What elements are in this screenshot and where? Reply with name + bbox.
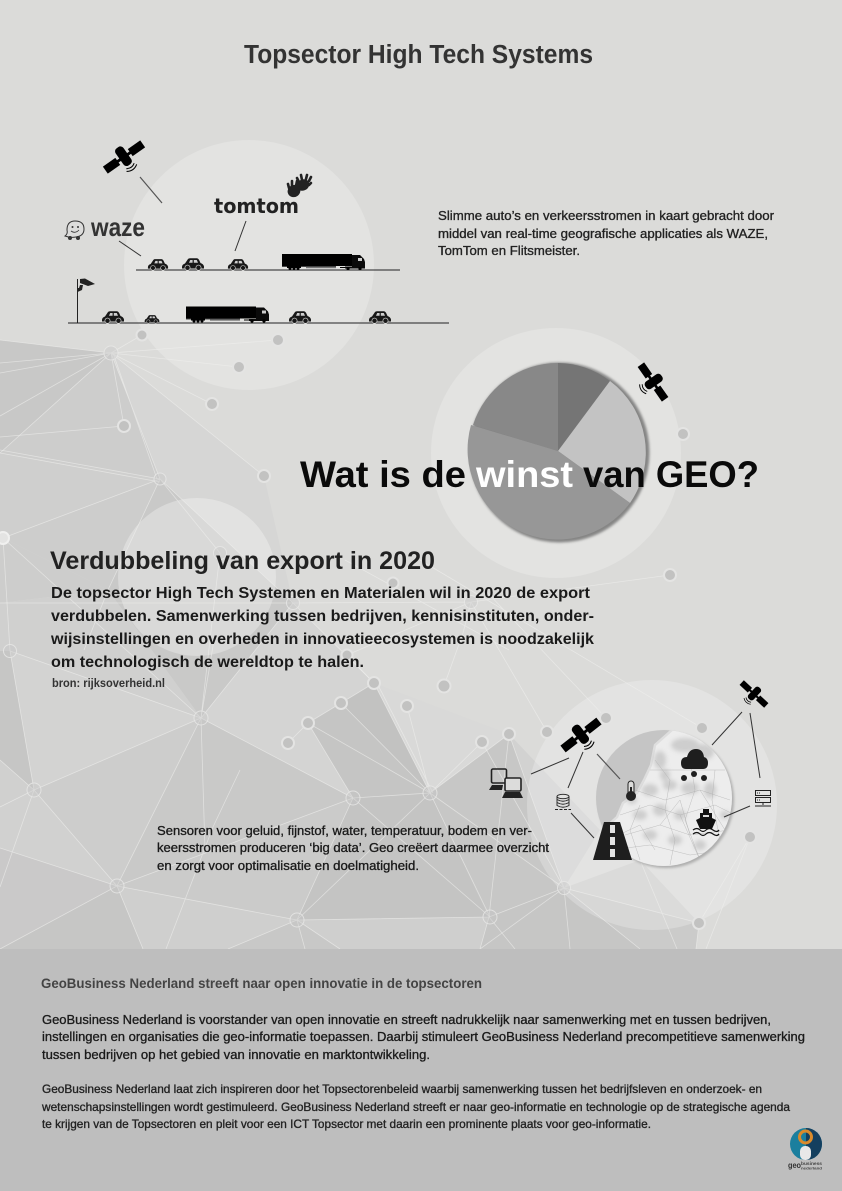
waze connector line [119, 241, 141, 256]
road lower with vehicles and camera [68, 278, 449, 323]
map of the Netherlands [590, 730, 740, 870]
icon: satellite [629, 359, 674, 408]
icon: thermometer [626, 781, 636, 801]
icon: satellite [99, 135, 152, 183]
export heading: Verdubbeling van export in 2020 [50, 547, 435, 575]
bottom panel heading: GeoBusiness Nederland streeft naar open innovatie in de topsectoren [41, 975, 482, 991]
satellite connector line [140, 177, 162, 203]
logo: geobusiness nederland: business [801, 1161, 823, 1166]
bottom panel [0, 949, 842, 1191]
export paragraph: verdubbelen. Samenwerking tussen bedrijven, kennisinstituten, onder- [51, 608, 594, 625]
traffic description text [438, 209, 774, 258]
traffic description text: Slimme auto’s en verkeersstromen in kaart gebracht door [438, 209, 774, 223]
bottom paragraph one: GeoBusiness Nederland is voorstander van open innovatie en streeft nadrukkelijk naar samenwerking met en tussen bedrijven, [42, 1012, 771, 1027]
logo: geobusiness nederland: nederland [801, 1166, 823, 1170]
sensors paragraph: keersstromen produceren ‘big data’. Geo creëert daarmee overzicht [157, 841, 550, 855]
bottom paragraph two [41, 1083, 791, 1131]
title: Topsector High Tech Systems [244, 41, 593, 69]
pie chart [468, 362, 650, 542]
bottom paragraph two: te krijgen van de Topsectoren en pleit voor een ICT Topsector met daarin een prominente plaats voor geo-informatie. [42, 1118, 651, 1131]
light circles behind the graphics [118, 140, 777, 930]
icon: camera [78, 278, 95, 323]
traffic description text: TomTom en Flitsmeister. [438, 244, 580, 258]
icon: server [755, 790, 771, 806]
network mesh background [0, 140, 777, 949]
logo: tomtom [214, 175, 311, 218]
icon: road [593, 822, 632, 860]
logo: geobusiness nederland: geo [788, 1161, 801, 1170]
logo: geobusiness nederland [788, 1128, 823, 1170]
bottom paragraph two: wetenschapsinstellingen wordt gestimuleerd. GeoBusiness Nederland streeft er naar geo-informatie en technologie op de strategische agenda [41, 1101, 791, 1114]
export paragraph: wijsinstellingen en overheden in innovatieecosystemen is noodzakelijk [50, 631, 594, 648]
bottom paragraph one [42, 1012, 805, 1062]
bottom diagram connector lines [531, 712, 760, 838]
bottom paragraph two: GeoBusiness Nederland laat zich inspireren door het Topsectorenbeleid waarbij samenwerking tussen het bedrijfsleven en onderzoek- en [42, 1083, 762, 1096]
tomtom connector line [235, 221, 246, 251]
icon: database [555, 794, 571, 810]
main question heading: van GEO? [583, 454, 759, 495]
export paragraph [50, 585, 594, 671]
traffic illustration [65, 135, 449, 323]
logo: waze: waze [90, 212, 145, 242]
bottom paragraph one: tussen bedrijven op het gebied van innovatie en marktontwikkeling. [42, 1047, 430, 1062]
logo: tomtom: tomtom [214, 194, 299, 218]
traffic description text: middel van real-time geografische applicaties als WAZE, [438, 227, 768, 241]
road upper with vehicles [136, 254, 400, 270]
icon: ship [693, 809, 719, 836]
sensors paragraph: Sensoren voor geluid, fijnstof, water, temperatuur, bodem en ver- [157, 824, 532, 838]
mesh hub nodes [4, 346, 570, 927]
source note: bron: rijksoverheid.nl [52, 676, 165, 690]
logo: waze [65, 212, 145, 242]
bottom paragraph one: instellingen en organisaties die geo-informatie toepassen. Daarbij stimuleert GeoBusiness Nederland precompetitieve samenwerking [42, 1029, 805, 1044]
icon: computers [489, 769, 523, 798]
icon: satellite left [556, 712, 608, 761]
main question heading: winst [475, 454, 573, 495]
mesh lines [0, 335, 750, 949]
icon: satellite right [734, 676, 772, 714]
sensors paragraph: en zorgt voor optimalisatie en doelmatigheid. [157, 859, 419, 873]
icon: cloud [681, 749, 708, 781]
export paragraph: De topsector High Tech Systemen en Materialen wil in 2020 de export [51, 585, 591, 602]
main question heading: Wat is de [300, 454, 466, 495]
main question heading [300, 454, 759, 495]
export paragraph: om technologisch de wereldtop te halen. [51, 654, 364, 671]
sensors paragraph [157, 824, 550, 873]
mesh small nodes [118, 330, 756, 929]
